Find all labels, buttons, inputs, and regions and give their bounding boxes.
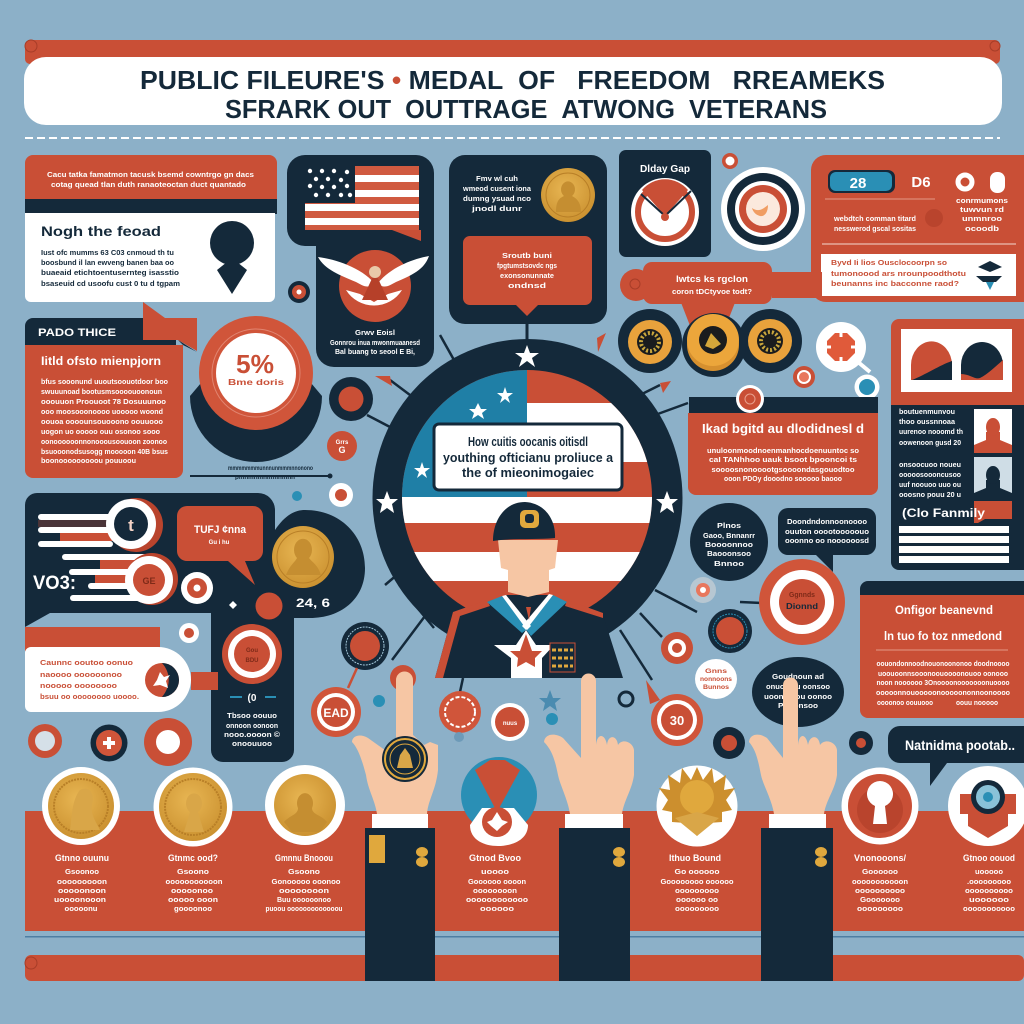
callout: exonsonunnate [500, 271, 554, 280]
panel: paid notice: PADO THICE [38, 327, 116, 339]
panel: top right stats: nesswerod gscal sositas [834, 224, 916, 233]
icon: circle marker left [329, 377, 373, 421]
icon row: left circles [28, 718, 192, 766]
medal column 4 with ribbon: oooooooon [473, 886, 517, 895]
panel: paid notice: swuuunoad bootusmsoooouoonoun [41, 387, 162, 396]
icon: white tag: Gnns [705, 669, 728, 675]
icon: gold coin [541, 168, 595, 222]
icon: navy oval: uoonoo ou oonoo [764, 692, 832, 701]
medal column 3: puoou ooooooooooooou [266, 904, 343, 913]
chart: 50 percent dial: 5% [236, 349, 274, 379]
speech: navy bubble: Boooonnoo [705, 540, 753, 549]
medal column 3: Gonooooo ooonoo [272, 877, 341, 886]
panel: flag and eagle [287, 155, 434, 367]
icon: white tag: nonnoons [700, 677, 733, 683]
panel: top left notice: boosbund il lan ewveng banen baa oo [41, 258, 174, 267]
medal column 4 with ribbon: Gtnod Bvoo [469, 853, 521, 863]
panel: left navy dashboard: nooo.oooon © [224, 730, 281, 739]
medal column 5 sunburst: ooooooooo [675, 904, 719, 913]
icon: lower ring: Gou [246, 648, 258, 654]
chart: 50 percent dial: Bme doris [228, 377, 284, 387]
panel: right domes and portraits: ooosno pouu 20 u [899, 490, 961, 499]
panel: right summary: noon noooooo 3Onoooonooooooonuoooo [876, 678, 1010, 687]
medal column 7 shield: ooooooooooo [963, 904, 1015, 913]
hand two [544, 674, 634, 981]
medal column 5 sunburst: Go oooooo [674, 867, 720, 876]
medal column 5 sunburst: Goooooooo oooooo [660, 877, 734, 886]
icon: navy oval [752, 657, 844, 727]
medal column 1: Gsoonoo [65, 867, 99, 876]
icon: red tag: G [338, 445, 346, 455]
panel: left navy dashboard: (0 [248, 693, 257, 704]
panel: paid notice: ooo moosooonoooo uooooo woond [41, 407, 163, 416]
panel: top right stats: conrmumons [956, 196, 1008, 205]
icon: small ring [181, 572, 213, 604]
panel: paid notice: bsuooonodsusogg mooooon 40B bsus [41, 447, 168, 456]
icon: large red ring: Dionnd [786, 602, 818, 611]
panel: paid notice [25, 302, 197, 478]
panel: top left notice: buaeaid etichtoentusernteg isasstio [41, 268, 179, 277]
speech: navy bubble: Bnnoo [714, 559, 745, 568]
medal column 2: goooonoo [174, 904, 212, 913]
medal column 3: Gsoono [288, 867, 320, 876]
medal column 4 with ribbon: oooooooooooo [466, 895, 528, 904]
panel: left navy dashboard: 24, 6 [296, 596, 330, 610]
panel: central right question: caI TANhhoo uauk bsoot bpooncoi ts [709, 455, 857, 464]
medal column 5 sunburst: ooooooooo [675, 886, 719, 895]
panel: top right stats: Byvd Ii lios Ousclocoorpn so [831, 258, 947, 267]
medal column 4 with ribbon: Goooooo oooon [468, 877, 526, 886]
icon: portrait two [974, 457, 1012, 501]
decorative timeline [190, 466, 332, 481]
panel: central right question [688, 385, 878, 495]
icon: small dots left [292, 483, 353, 507]
callout: red speech: TUFJ ¢nna [194, 524, 247, 536]
medal column 2 [154, 768, 232, 913]
panel: gauge [619, 150, 711, 257]
icon: red badge 30: 30 [670, 713, 684, 728]
icon: red tag [327, 431, 357, 461]
panel: right domes and portraits: ooooosoooncusoo [899, 470, 961, 479]
title [140, 65, 885, 124]
panel: coin quote: wmeod cusent iona [462, 184, 532, 193]
panel: central right question: unuloonmoodnoenmanhocdoenuuntoc so [707, 446, 859, 455]
panel: central right question: ooon PDOy dooodno sooooo baooo [724, 474, 842, 483]
chart: 50 percent dial [190, 316, 322, 462]
icon: portrait one [974, 409, 1012, 453]
icon: small beacon [288, 281, 310, 303]
icon: badge [736, 385, 764, 413]
icon: coin [272, 526, 334, 588]
medal column 6 keyhole: ooooooooooon [852, 877, 908, 886]
icon: pale knob [690, 577, 716, 603]
panel: top right stats: unmnroo [962, 214, 1003, 223]
panel: right domes and portraits [891, 319, 1024, 570]
icon: large red ring: Ggnnds [789, 592, 815, 599]
medal column 6 keyhole: oooooooooo [855, 886, 905, 895]
icon: lower ring: BDU [246, 658, 258, 664]
icon: large red ring [759, 559, 845, 645]
speech: navy box: Doondndonnoonoooo [787, 517, 867, 526]
decorative timeline: pmnmnmnmmnmnn [235, 475, 295, 481]
panel: paid notice: ooouuon Proouoot 78 Dosuuunoo [41, 397, 166, 406]
icon: navy dot [713, 727, 745, 759]
medal column 3: oooooooon [279, 886, 330, 895]
icon: navy oval: Pnoonsoo [778, 701, 818, 710]
medal column 6 keyhole [842, 768, 918, 913]
icons: mid left circles: nuus [503, 721, 518, 727]
medal column 7 shield: oooooooooo [965, 886, 1013, 895]
medal column 6 keyhole: ooooooooo [857, 904, 903, 913]
icon: flag [305, 166, 421, 241]
panel: paid notice: uogon uo ooooo ouu osonoo sooo [41, 427, 160, 436]
bars and ring two: GE [142, 576, 156, 586]
title: SFRARK OUT OUTTRAGE ATWONG VETERANS [225, 94, 827, 124]
panel: right summary: ln tuo fo toz nmedond [884, 629, 1002, 643]
medal column 2: Gsoono [177, 867, 209, 876]
callout: red speech [177, 506, 263, 585]
medal column 3: Buu oooooonoo [277, 895, 331, 904]
panel: right summary: oooonoo oouuooo [877, 698, 933, 707]
icon: navy oval: Goudnoun ad [772, 672, 824, 681]
medal column 5 sunburst: Ithuo Bound [669, 853, 721, 863]
panel: right domes and portraits: (Clo Fanmily [902, 506, 985, 520]
icon: small marker [722, 153, 738, 169]
icon: navy ring [708, 609, 752, 653]
icon: lower ring [222, 624, 282, 684]
speech: navy box: ouuton ooootooooouo [785, 527, 869, 536]
icon: hand coin [382, 736, 428, 782]
main circle with flag [372, 339, 682, 678]
banner: connector label [620, 262, 822, 372]
icon: pin [210, 221, 254, 294]
panel: coin quote [449, 155, 607, 345]
icons: mid left circles [311, 622, 529, 742]
panel: paid notice: oouoa oooounsouooono oouuooo [41, 417, 163, 426]
medal column 6 keyhole: Gooooooo [860, 895, 900, 904]
bars and ring one: t [128, 516, 134, 535]
icon: white tag: Bunnos [703, 685, 730, 691]
medal column 4 with ribbon: oooooo [480, 904, 515, 913]
bars and ring one [38, 498, 163, 552]
figure: soldier [435, 502, 623, 678]
panel: right speech and circle cluster [539, 503, 876, 759]
panel: lower left callout: Caunnc ooutoo oonuo [40, 658, 133, 667]
panel: top right stats: 28 [850, 175, 866, 192]
panel: lower left callout: bsuu oo oooooooo uoooo. [40, 692, 139, 701]
callout: central question [434, 424, 622, 490]
hand three [749, 678, 837, 981]
medal column 4 with ribbon [461, 757, 537, 913]
panel: coin quote: jnodl dunr [471, 204, 522, 213]
speech: navy box: ooonno oo noooooosd [785, 536, 869, 545]
medal column 7 shield: .ooooooooo [967, 877, 1011, 886]
panel: top left notice: Nogh the feoad [41, 223, 161, 239]
panel: paid notice: oonoooooonnonooousoouoon zoonoo [41, 437, 167, 446]
icon: eagle emblem [318, 250, 429, 322]
medal column 7 shield: uoooooo [969, 895, 1010, 904]
panel: right domes and portraits: thoo oussnnoaa [899, 417, 956, 426]
panel: paid notice: bfus sooonund uuoutsoouotdoor boo [41, 377, 168, 386]
medal column 1: uoooonooon [54, 895, 106, 904]
panel: top right stats: D6 [911, 174, 931, 191]
panel: right summary: uoouoonnsooonoouoooonouoo oonooo [878, 669, 1008, 678]
panel: top left notice: bsaseuid cd usoofu cust 0 tu d tgpam [41, 279, 180, 288]
panel: top left notice: Cacu tatka famatmon tacusk bsemd cowntrgo gn dacs [47, 170, 254, 179]
panel: right summary: ooooonnouooooonooooononnoonoooo [876, 688, 1010, 697]
hand one with coin [352, 672, 438, 981]
medal column 6 keyhole: Vnonooons/ [854, 853, 906, 863]
icon: navy oval: onuon ou oonsoo [766, 682, 830, 691]
panel: left navy dashboard: VO3: [33, 573, 76, 594]
panel: right domes and portraits: onsoocuoo noueu [899, 460, 961, 469]
panel: top right stats: beunanns inc bacconne raod? [831, 279, 959, 288]
panel: right domes and portraits: boutuenmunvou [899, 407, 955, 416]
icon: side arrows [375, 333, 671, 704]
icon: red dot ring [661, 632, 693, 664]
callout: red speech: Gu i hu [209, 540, 230, 546]
coins row [618, 309, 802, 377]
speech: navy bubble [690, 503, 768, 581]
callout: central question: How cuitis oocanis oitisdl [468, 435, 588, 449]
icons: mid left circles: EAD [323, 706, 349, 720]
speech: navy bubble: Plnos [717, 521, 741, 530]
banner: connector label: coron tDCtyvoe todt? [672, 287, 752, 296]
medal column 3 [265, 765, 345, 913]
panel: right summary: oouu nooooo [956, 698, 998, 707]
icon: target [721, 167, 805, 251]
medal column 2: ooooonoo [171, 886, 213, 895]
panel: flag and eagle: Gonnrou inua mwonmuaanesd [330, 338, 420, 347]
medal column 1: ooooooooon [57, 877, 107, 886]
medal column 3: Gmnnu Bnooou [275, 853, 333, 863]
banner: connector label: lwtcs ks rgclon [676, 274, 748, 284]
icon: white tag [695, 659, 737, 699]
panel: paid notice: Iitld ofsto mienpjorn [41, 354, 161, 368]
panel: top left notice: cotag quead tlan duth ranaoteoctan duct quantado [51, 180, 246, 189]
panel: right summary [860, 581, 1024, 718]
panel: paid notice: boonooooooooou pouuoou [41, 456, 136, 465]
medal column 4 with ribbon: uoooo [481, 867, 509, 876]
speech: bottom right label: Natnidma pootab.. [905, 737, 1015, 753]
callout: central question: youthing ofticianu proliuce a [443, 451, 614, 465]
icon: star disc [145, 663, 179, 697]
panel: left navy dashboard: onnoon oonoon [226, 721, 278, 730]
callout [463, 236, 592, 316]
callout: Sroutb buni [502, 251, 552, 260]
panel: top right stats: tuwvun rd [960, 205, 1004, 214]
panel: top right stats: webdtch comman titard [833, 214, 916, 223]
icon: red tag: Grrs [336, 440, 349, 446]
panel: left navy dashboard [25, 493, 365, 762]
icon: ring marker [793, 366, 815, 388]
medal column 7 shield: uooooo [975, 867, 1003, 876]
bars and ring two [62, 553, 178, 605]
panel: top left notice: Iust ofc mumms 63 C03 cnmoud th tu [41, 248, 174, 257]
icon: magnifier [816, 322, 880, 400]
callout: ondnsd [508, 281, 547, 290]
medal column 7 shield [948, 766, 1024, 913]
callout: fpgtumstsovdc ngs [497, 261, 557, 270]
speech: navy box [778, 508, 876, 572]
panel: central right question: Ikad bgitd au dlodidnesl d [702, 421, 864, 436]
decorative timeline: mmmmmmmunnnunmmmnnonono [228, 466, 313, 472]
icon: cap [976, 261, 1002, 290]
connector lines [367, 335, 762, 692]
medal column 7 shield: Gtnoo oouod [963, 853, 1015, 863]
panel: right summary: Onfigor beanevnd [895, 603, 993, 617]
panel: gauge: Dlday Gap [640, 164, 690, 175]
speech: navy bubble: Gaoo, Bnnanrr [703, 531, 755, 540]
panel: top left notice [25, 155, 277, 302]
panel: right domes and portraits: oowenoon gusd 20 [899, 438, 961, 447]
icon: stars [376, 345, 678, 513]
medal column 1: ooooonoon [58, 886, 106, 895]
panel: lower left callout: naoooo oooooonoo [40, 670, 122, 679]
speech: bottom right label [888, 726, 1024, 786]
medal column 6 keyhole: Goooooo [862, 867, 898, 876]
bottom ribbons [25, 811, 1024, 981]
medal column 5 sunburst [656, 766, 738, 913]
panel: right domes and portraits: uuf noouoo uuo ou [899, 480, 961, 489]
panel: coin quote: Fmv wl cuh [476, 174, 518, 183]
panel: top right stats: tumonoood ars nrounpoodthotu [831, 269, 966, 278]
title: PUBLIC FILEURE'S • MEDAL OF FREEDOM RREAMEKS [140, 65, 885, 95]
panel: lower left callout [25, 627, 218, 712]
callout: central question: the of mieonimogaiec [462, 466, 594, 480]
icon: red marker [179, 623, 199, 643]
medal column 1: ooooonu [64, 904, 98, 913]
panel: left navy dashboard: Tbsoo oouuo [227, 711, 277, 720]
panel: right domes and portraits: uurenoo nooomd th [899, 427, 963, 436]
speech: navy bubble: Baooonsoo [707, 549, 751, 558]
panel: flag and eagle: Bal buang to seool E Bi, [335, 347, 415, 356]
panel: coin quote: dumng ysuad nco [463, 194, 531, 203]
medal column 1: Gtnno ouunu [55, 853, 109, 863]
medal column 2: Gtnmc ood? [168, 853, 218, 863]
panel: top right stats [811, 155, 1024, 302]
panel: left navy dashboard: onoouuoo [232, 739, 272, 748]
medal column 2: ooooo ooon [168, 895, 218, 904]
title banner [24, 40, 1002, 125]
panel: flag and eagle: Grwv Eoisl [355, 328, 395, 337]
medal column 5 sunburst: oooooo oo [676, 895, 718, 904]
icon: red badge 30 [651, 694, 703, 746]
panel: top right stats: ocoodb [965, 224, 1000, 233]
panel: central right question: soooosnonooootgsoooondasgouodtoo [712, 465, 855, 474]
panel: lower left callout: nooooo oooooooo [40, 681, 117, 690]
icon: navy dot small [849, 731, 873, 755]
medal column 2: ooooooooooon [166, 877, 223, 886]
medal column 1 [42, 767, 120, 913]
